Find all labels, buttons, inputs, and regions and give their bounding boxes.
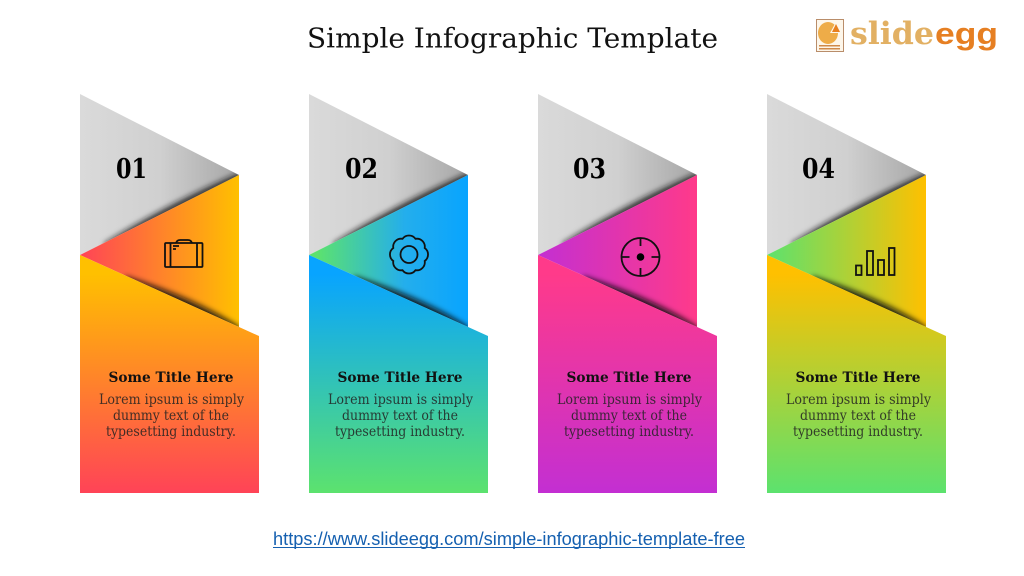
lower panel: [767, 255, 946, 493]
lower panel: [309, 255, 488, 493]
grey fold with number: [538, 94, 703, 255]
text block: [328, 370, 473, 440]
text block: typesetting industry.: [793, 424, 923, 440]
text block: Some Title Here: [338, 370, 462, 386]
panel: step 04: [767, 94, 946, 493]
number 01: 01: [116, 154, 147, 185]
text block: Lorem ipsum is simply: [328, 392, 473, 408]
grey fold with number: [767, 94, 932, 255]
number 02: 02: [345, 154, 378, 185]
title: Simple Infographic Template: [307, 24, 718, 54]
source link: https://www.slideegg.com/simple-infographic-template-free: [273, 529, 745, 549]
lower panel: [80, 255, 259, 493]
text block: Some Title Here: [108, 370, 234, 386]
middle fold: [767, 175, 926, 335]
text block: dummy text of the: [571, 408, 687, 424]
text block: dummy text of the: [342, 408, 458, 424]
text block: Lorem ipsum is simply: [99, 392, 244, 408]
icon: target: [622, 238, 660, 276]
text block: dummy text of the: [800, 408, 916, 424]
panel: step 03: [538, 94, 717, 493]
icon: bar chart: [856, 248, 894, 275]
icon: gear: [390, 235, 428, 274]
middle fold: [80, 175, 239, 335]
lower panel: [538, 255, 717, 493]
text block: Some Title Here: [566, 370, 692, 386]
text block: [99, 370, 244, 440]
text block: Lorem ipsum is simply: [786, 392, 931, 408]
grey fold with number: [80, 94, 245, 255]
text block: dummy text of the: [113, 408, 229, 424]
number 03: 03: [573, 154, 606, 185]
text block: Some Title Here: [796, 370, 920, 386]
grey fold with number: [309, 94, 474, 255]
middle fold: [309, 175, 468, 335]
panel: step 01: [80, 94, 259, 493]
text block: [786, 370, 931, 440]
logo: slideegg: egg: [935, 16, 998, 51]
panel: step 02: [309, 94, 488, 493]
text block: [557, 370, 702, 440]
text block: typesetting industry.: [106, 424, 236, 440]
logo: slideegg: slide: [850, 16, 934, 52]
logo: slideegg: [816, 16, 998, 52]
number 04: 04: [802, 154, 835, 185]
icon: briefcase: [165, 240, 202, 267]
text block: Lorem ipsum is simply: [557, 392, 702, 408]
text block: typesetting industry.: [564, 424, 694, 440]
middle fold: [538, 175, 697, 335]
text block: typesetting industry.: [335, 424, 465, 440]
